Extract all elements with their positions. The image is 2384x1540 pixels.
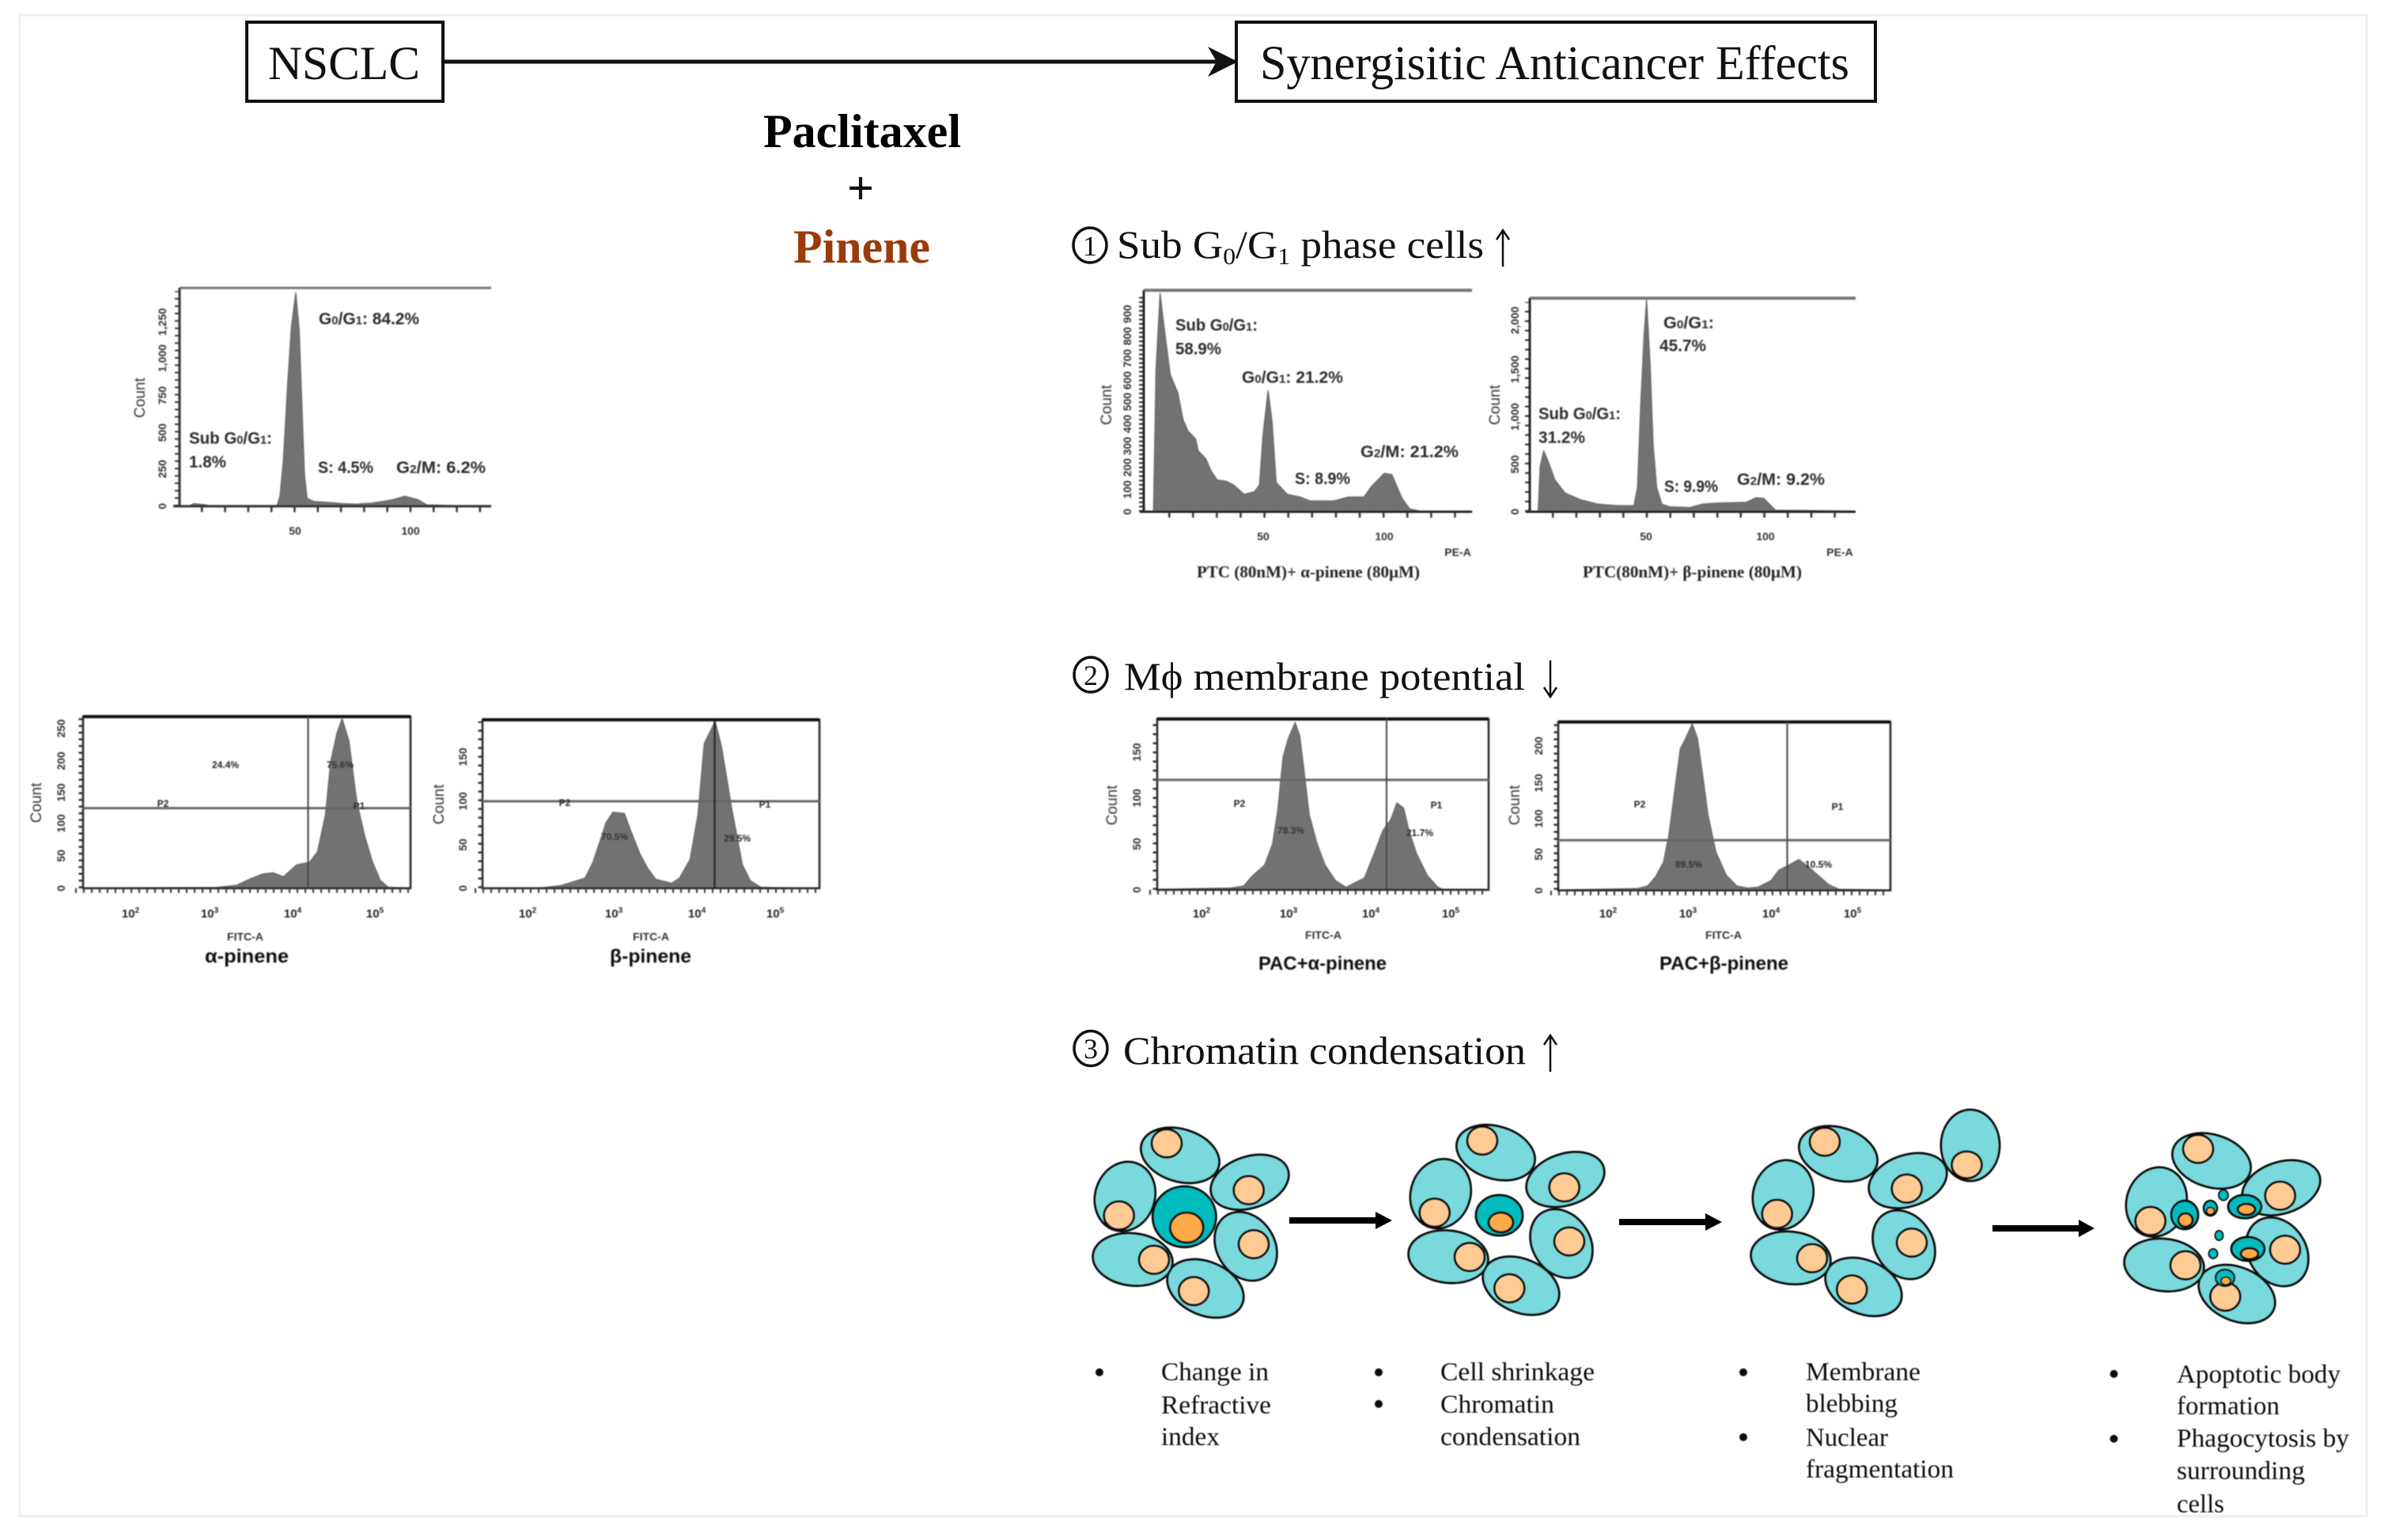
diagram: cell cluster, apoptotic bodies — [2117, 1124, 2327, 1334]
chart: PAC + alpha-pinene membrane potential: 78.3% — [1277, 825, 1304, 836]
chart: PTC + beta-pinene cell cycle: G2/M: 9.2% — [1737, 471, 1825, 489]
chart: PTC + beta-pinene cell cycle: Sub G0/G1: — [1538, 405, 1621, 423]
chart: PAC + beta-pinene membrane potential: P1 — [1832, 801, 1844, 812]
chart: alpha-pinene membrane potential: 24.4% — [212, 759, 239, 770]
heading: sub G0/G1 phase cells: phase cells — [1290, 222, 1484, 267]
treatment label: Paclitaxel + Pinene: Pinene — [793, 221, 930, 273]
chart: control cell cycle histogram: 100 — [401, 524, 420, 537]
chart: control cell cycle histogram: G0/G1: 84.2% — [319, 310, 419, 328]
chart: PAC + alpha-pinene membrane potential: 0 — [1130, 887, 1143, 893]
chart: PTC + alpha-pinene cell cycle: Sub G0/G1: — [1175, 316, 1258, 335]
chart: alpha-pinene membrane potential: 250 — [55, 719, 67, 738]
arrow: stage 1 to 2 — [1289, 1212, 1392, 1229]
chart: PTC + beta-pinene cell cycle: 31.2% — [1538, 429, 1585, 447]
chart: alpha-pinene membrane potential — [28, 717, 411, 967]
chart: beta-pinene membrane potential: 0 — [456, 885, 469, 891]
chart: PAC + beta-pinene membrane potential: 4 — [1776, 906, 1780, 915]
treatment label: Paclitaxel + Pinene: + — [847, 162, 874, 214]
chart: PTC + alpha-pinene cell cycle: 500 — [1121, 392, 1133, 411]
text block: stage 4 notes: Apoptotic body — [2177, 1360, 2341, 1389]
chart: alpha-pinene membrane potential: 10 — [122, 907, 135, 921]
chart: PTC + beta-pinene cell cycle: 50 — [1640, 530, 1652, 543]
chart: control cell cycle histogram: 500 — [156, 423, 168, 442]
chart: PTC + beta-pinene cell cycle: G0/G1: — [1663, 314, 1714, 332]
chart: beta-pinene membrane potential: 10 — [605, 907, 619, 921]
heading: sub G0/G1 phase cells: 1 — [1277, 244, 1290, 270]
text block: stage 4 notes: formation — [2177, 1392, 2280, 1421]
text block: stage 1 notes — [1096, 1358, 1271, 1451]
chart: PTC + alpha-pinene cell cycle: 700 — [1121, 349, 1133, 368]
text block: stage 3 notes: Membrane — [1806, 1358, 1920, 1387]
text block: stage 2 notes: Chromatin — [1440, 1391, 1554, 1419]
chart: beta-pinene membrane potential: 70.5% — [601, 831, 628, 842]
chart: alpha-pinene membrane potential: 5 — [380, 906, 384, 915]
chart: PTC + alpha-pinene cell cycle: 100 — [1375, 530, 1394, 543]
chart: PAC + beta-pinene membrane potential: 10 — [1679, 907, 1693, 921]
text block: stage 4 notes: surrounding — [2177, 1457, 2305, 1485]
chart: PAC + alpha-pinene membrane potential: FITC-A — [1305, 929, 1341, 941]
arrow: stage 2 to 3 — [1619, 1213, 1722, 1231]
chart: PTC + alpha-pinene cell cycle: 900 — [1121, 305, 1133, 324]
chart: PTC + beta-pinene cell cycle: 1,500 — [1508, 355, 1521, 384]
chart: control cell cycle histogram: 750 — [156, 386, 168, 405]
box: Synergisitic Anticancer Effects: Synergisitic Anticancer Effects — [1260, 37, 1849, 90]
chart: beta-pinene membrane potential: 3 — [619, 906, 623, 915]
chart: beta-pinene membrane potential: 150 — [456, 747, 469, 766]
chart: PAC + beta-pinene membrane potential: 10 — [1762, 907, 1776, 921]
text block: stage 1 notes: index — [1161, 1423, 1220, 1451]
chart: PAC + alpha-pinene membrane potential: 10 — [1193, 907, 1206, 921]
chart: PTC + alpha-pinene cell cycle: 50 — [1257, 530, 1270, 543]
chart: beta-pinene membrane potential: Count — [431, 784, 448, 824]
chart: PTC + alpha-pinene cell cycle — [1099, 290, 1472, 581]
chart: PAC + beta-pinene membrane potential: FITC-A — [1705, 929, 1742, 941]
chart: control cell cycle histogram: 1.8% — [189, 453, 226, 471]
chart: PAC + alpha-pinene membrane potential: 3 — [1293, 906, 1298, 915]
chart: PAC + beta-pinene membrane potential: 150 — [1532, 774, 1545, 793]
chart: PAC + beta-pinene membrane potential: 5 — [1857, 906, 1862, 915]
chart: PTC + beta-pinene cell cycle: 1,000 — [1508, 403, 1521, 431]
chart: PTC + alpha-pinene cell cycle: 600 — [1121, 371, 1133, 390]
chart: PAC + beta-pinene membrane potential: P2 — [1634, 799, 1646, 810]
chart: alpha-pinene membrane potential: 100 — [55, 814, 67, 833]
chart: PTC + alpha-pinene cell cycle: 400 — [1121, 414, 1133, 433]
text block: stage 1 notes: Refractive — [1161, 1391, 1271, 1420]
chart: alpha-pinene membrane potential: FITC-A — [227, 930, 263, 943]
chart: PAC + beta-pinene membrane potential: 10 — [1844, 907, 1857, 921]
chart: control cell cycle histogram: Count — [132, 377, 149, 418]
chart: PAC + beta-pinene membrane potential — [1507, 722, 1890, 974]
text block: stage 3 notes: fragmentation — [1806, 1455, 1954, 1484]
chart: control cell cycle histogram: G2/M: 6.2% — [396, 459, 486, 477]
chart: PTC + beta-pinene cell cycle: PTC(80nM)+ β-pinene (80µM) — [1583, 562, 1802, 581]
chart: PAC + beta-pinene membrane potential: 10 — [1599, 907, 1613, 921]
chart: PTC + alpha-pinene cell cycle: G0/G1: 21.2% — [1242, 369, 1343, 387]
heading: membrane potential: 2 — [1084, 660, 1098, 691]
heading: membrane potential: Mϕ membrane potential — [1124, 654, 1525, 698]
chart: beta-pinene membrane potential: FITC-A — [633, 930, 669, 943]
heading: chromatin condensation: 3 — [1084, 1033, 1098, 1065]
chart: beta-pinene membrane potential: 4 — [702, 906, 706, 915]
diagram: cell cluster, blebbing — [1744, 1110, 2000, 1327]
heading: sub G0/G1 phase cells: 1 — [1083, 230, 1097, 262]
chart: alpha-pinene membrane potential: P1 — [354, 800, 365, 812]
chart: PAC + alpha-pinene membrane potential: 2 — [1206, 906, 1211, 915]
chart: PAC + alpha-pinene membrane potential: 50 — [1130, 838, 1143, 850]
chart: alpha-pinene membrane potential: 200 — [55, 751, 67, 770]
chart: PTC + alpha-pinene cell cycle: G2/M: 21.2% — [1360, 443, 1459, 461]
chart: control cell cycle histogram: S: 4.5% — [318, 459, 373, 477]
chart: PTC + beta-pinene cell cycle: 45.7% — [1659, 337, 1706, 355]
chart: PAC + alpha-pinene membrane potential: P1 — [1431, 800, 1443, 811]
text block: stage 2 notes — [1375, 1358, 1595, 1451]
chart: PTC + alpha-pinene cell cycle: S: 8.9% — [1295, 470, 1350, 488]
chart: alpha-pinene membrane potential: 50 — [55, 849, 67, 862]
chart: beta-pinene membrane potential: 100 — [456, 792, 469, 811]
chart: alpha-pinene membrane potential: 3 — [214, 906, 219, 915]
chart: PTC + alpha-pinene cell cycle: 100 — [1121, 480, 1133, 499]
heading: sub G0/G1 phase cells: /G — [1236, 222, 1277, 267]
chart: PAC + beta-pinene membrane potential: 89.5% — [1675, 859, 1702, 870]
chart: PTC + alpha-pinene cell cycle: PE-A — [1444, 546, 1471, 558]
chart: PAC + beta-pinene membrane potential: 3 — [1693, 906, 1697, 915]
text block: stage 1 notes: Change in — [1161, 1358, 1269, 1387]
chart: beta-pinene membrane potential: 10 — [519, 907, 532, 921]
text block: stage 2 notes: Cell shrinkage — [1440, 1358, 1595, 1387]
text block: stage 2 notes: condensation — [1440, 1423, 1580, 1451]
chart: alpha-pinene membrane potential: α-pinene — [205, 946, 289, 967]
chart: alpha-pinene membrane potential: 10 — [366, 907, 380, 921]
chart: PAC + alpha-pinene membrane potential: 10 — [1362, 907, 1376, 921]
text block: stage 3 notes: Nuclear — [1806, 1424, 1888, 1452]
chart: PAC + alpha-pinene membrane potential: P2 — [1234, 798, 1246, 809]
diagram: cell cluster, shrinkage — [1402, 1116, 1611, 1326]
chart: PTC + alpha-pinene cell cycle: 200 — [1121, 458, 1133, 477]
chart: control cell cycle histogram: 1,250 — [156, 308, 168, 336]
chart: beta-pinene membrane potential — [431, 720, 819, 967]
chart: alpha-pinene membrane potential: 0 — [55, 885, 67, 891]
chart: alpha-pinene membrane potential: Count — [28, 782, 45, 823]
chart: PTC + beta-pinene cell cycle — [1487, 298, 1856, 581]
chart: PTC + alpha-pinene cell cycle: 0 — [1121, 509, 1133, 515]
chart: PTC + beta-pinene cell cycle: 500 — [1508, 455, 1521, 474]
chart: alpha-pinene membrane potential: 2 — [135, 906, 140, 915]
heading: chromatin condensation: Chromatin condensation — [1123, 1028, 1526, 1073]
text block: stage 4 notes: cells — [2177, 1490, 2224, 1519]
chart: PAC + alpha-pinene membrane potential: 5 — [1455, 906, 1460, 915]
chart: PAC + alpha-pinene membrane potential: 100 — [1130, 789, 1143, 808]
heading: sub G0/G1 phase cells: Sub G — [1117, 222, 1217, 267]
chart: alpha-pinene membrane potential: 10 — [284, 907, 297, 921]
chart: control cell cycle histogram: 50 — [289, 524, 301, 537]
chart: beta-pinene membrane potential: 29.5% — [724, 833, 751, 844]
chart: beta-pinene membrane potential: 2 — [532, 906, 537, 915]
chart: PTC + alpha-pinene cell cycle: 300 — [1121, 437, 1133, 456]
heading: sub G0/G1 phase cells: 0 — [1223, 244, 1236, 270]
chart: PAC + alpha-pinene membrane potential: PAC+α-pinene — [1258, 953, 1387, 974]
treatment label: Paclitaxel + Pinene: Paclitaxel — [763, 105, 961, 157]
chart: PAC + alpha-pinene membrane potential: 10 — [1280, 907, 1293, 921]
chart: alpha-pinene membrane potential: 75.6% — [327, 759, 354, 770]
chart: PTC + beta-pinene cell cycle: Count — [1487, 384, 1504, 425]
chart: control cell cycle histogram: 1,000 — [156, 344, 168, 373]
box: Synergisitic Anticancer Effects — [1236, 22, 1875, 101]
chart: PTC + alpha-pinene cell cycle: PTC (80nM)+ α-pinene (80µM) — [1197, 562, 1420, 581]
chart: beta-pinene membrane potential: 50 — [456, 838, 469, 851]
chart: PTC + beta-pinene cell cycle: S: 9.9% — [1664, 478, 1718, 496]
chart: PTC + beta-pinene cell cycle: 100 — [1756, 530, 1775, 543]
chart: PAC + beta-pinene membrane potential: 0 — [1532, 887, 1545, 894]
chart: PAC + alpha-pinene membrane potential — [1104, 719, 1489, 974]
chart: PAC + beta-pinene membrane potential: 10.5% — [1805, 859, 1832, 870]
text block: stage 3 notes: blebbing — [1806, 1390, 1898, 1418]
chart: PAC + beta-pinene membrane potential: 200 — [1532, 736, 1545, 755]
chart: control cell cycle histogram: 0 — [156, 503, 168, 509]
chart: beta-pinene membrane potential: 10 — [766, 907, 780, 921]
chart: beta-pinene membrane potential: 5 — [780, 906, 785, 915]
chart: PAC + alpha-pinene membrane potential: 150 — [1130, 743, 1143, 762]
chart: PAC + beta-pinene membrane potential: 2 — [1613, 906, 1618, 915]
chart: PTC + beta-pinene cell cycle: 0 — [1508, 509, 1521, 515]
text block: stage 4 notes: Phagocytosis by — [2177, 1425, 2350, 1453]
chart: PTC + alpha-pinene cell cycle: Count — [1099, 384, 1115, 425]
chart: PTC + beta-pinene cell cycle: 2,000 — [1508, 306, 1521, 335]
header: NSCLC to synergistic effects flow — [247, 22, 1875, 101]
arrow: stage 3 to 4 — [1992, 1220, 2095, 1237]
text block: stage 3 notes — [1739, 1358, 1954, 1484]
chart: PAC + beta-pinene membrane potential: 100 — [1532, 809, 1545, 828]
box: NSCLC — [247, 22, 443, 101]
chart: control cell cycle histogram — [132, 288, 491, 537]
chart: PAC + alpha-pinene membrane potential: 4 — [1376, 906, 1380, 915]
chart: beta-pinene membrane potential: 10 — [688, 907, 702, 921]
chart: PTC + alpha-pinene cell cycle: 58.9% — [1175, 340, 1221, 358]
chart: beta-pinene membrane potential: P1 — [759, 799, 771, 810]
chart: alpha-pinene membrane potential: 4 — [297, 906, 302, 915]
chart: control cell cycle histogram: 250 — [156, 460, 168, 479]
chart: PTC + beta-pinene cell cycle: PE-A — [1826, 546, 1853, 558]
chart: alpha-pinene membrane potential: 150 — [55, 783, 67, 802]
chart: PAC + alpha-pinene membrane potential: 21.7% — [1406, 827, 1433, 838]
chart: beta-pinene membrane potential: P2 — [559, 797, 571, 808]
diagram: cell cluster, refractive change — [1086, 1118, 1296, 1329]
chart: PAC + beta-pinene membrane potential: 50 — [1532, 848, 1545, 861]
chart: PTC + alpha-pinene cell cycle: 800 — [1121, 327, 1133, 346]
chart: control cell cycle histogram: Sub G0/G1: — [189, 429, 272, 448]
box: NSCLC: NSCLC — [268, 37, 420, 89]
treatment label: Paclitaxel + Pinene — [763, 105, 961, 273]
chart: alpha-pinene membrane potential: P2 — [157, 798, 169, 809]
chart: alpha-pinene membrane potential: 10 — [201, 907, 214, 921]
chart: PAC + alpha-pinene membrane potential: Count — [1104, 785, 1121, 825]
arrow: NSCLC to effects — [443, 47, 1238, 77]
chart: PAC + alpha-pinene membrane potential: 10 — [1442, 907, 1455, 921]
chart: PAC + beta-pinene membrane potential: Count — [1507, 785, 1523, 825]
text block: stage 4 notes — [2110, 1360, 2350, 1519]
chart: beta-pinene membrane potential: β-pinene — [610, 946, 691, 967]
chart: PAC + beta-pinene membrane potential: PAC+β-pinene — [1659, 953, 1788, 974]
heading: sub G0/G1 phase cells — [1073, 222, 1509, 270]
